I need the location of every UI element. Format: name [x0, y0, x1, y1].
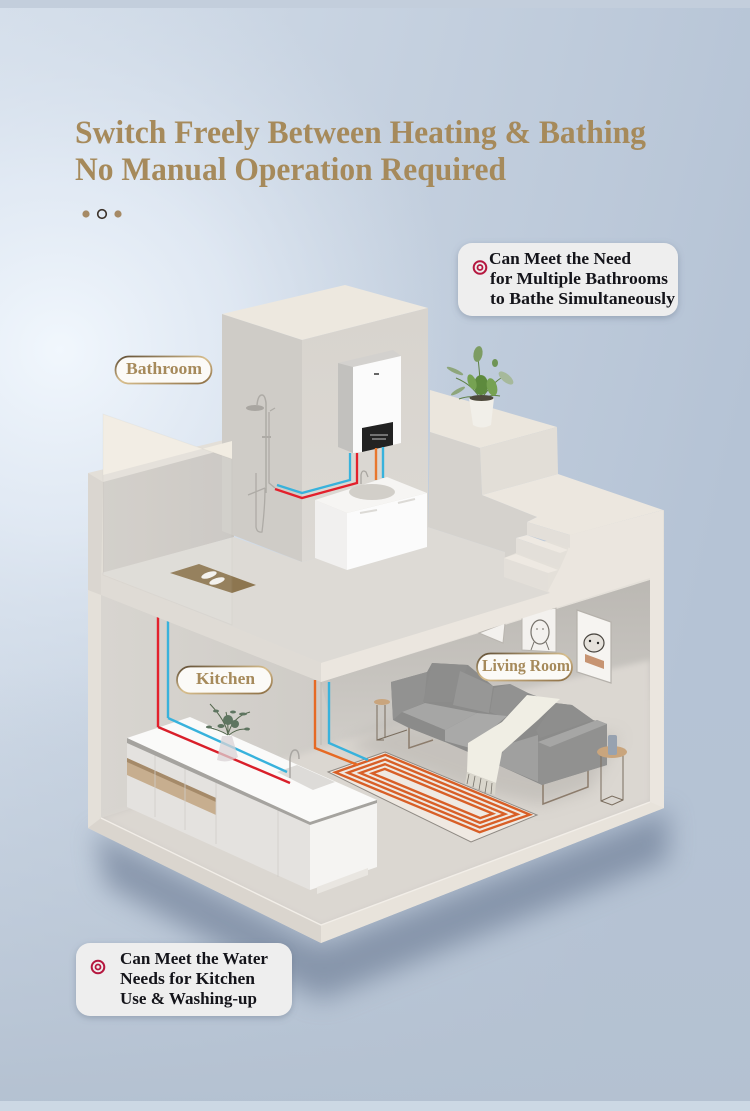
- label: Kitchen: Kitchen: [196, 669, 256, 688]
- pagination dots: [82, 210, 122, 218]
- kitchen pipes on counter top: [158, 718, 290, 783]
- heater outlet pipes: [376, 447, 383, 480]
- callout: multiple bathrooms: to Bathe Simultaneously: [490, 289, 676, 308]
- upper floor surface: [101, 527, 550, 663]
- hot and cold pipes to shower: [275, 453, 357, 498]
- kitchen sink and tap: [277, 750, 335, 790]
- callout: kitchen water: [76, 943, 292, 1016]
- basin cabinet: [315, 471, 427, 570]
- stairs: [504, 522, 570, 591]
- underfloor heating coil: [328, 752, 537, 842]
- label: Bathroom: [116, 356, 212, 384]
- side table right: [597, 735, 627, 805]
- label: Living Room: Living Room: [482, 656, 570, 675]
- side table left: [374, 699, 407, 740]
- water heater: [338, 350, 401, 453]
- callout: multiple bathrooms: Can Meet the Need: [489, 249, 631, 268]
- tall wall box: [222, 285, 428, 562]
- floor slab edge: [101, 510, 664, 808]
- title: No Manual Operation Required: [75, 152, 506, 188]
- lower level shell: [88, 473, 664, 943]
- label: Bathroom: Bathroom: [126, 359, 202, 378]
- bathroom side wall: [88, 438, 234, 595]
- back cushions: [423, 663, 593, 738]
- shower set: [246, 395, 275, 532]
- vase plant: [206, 704, 250, 761]
- lower level pipes: [158, 616, 368, 765]
- glass shower screen: [103, 414, 232, 625]
- seats: [402, 703, 538, 782]
- label: Kitchen: [177, 666, 272, 694]
- wall art: [479, 608, 611, 683]
- potted plant: [446, 345, 515, 428]
- callout: kitchen water: Can Meet the Water: [120, 949, 268, 968]
- sofa right arm: [538, 720, 607, 785]
- sofa legs: [409, 726, 588, 804]
- icon: target: [474, 261, 486, 274]
- title: Switch Freely Between Heating & Bathing: [75, 115, 646, 151]
- kitchen counter: [127, 717, 377, 894]
- icon: target: [92, 961, 104, 973]
- building shadow: [95, 810, 668, 1000]
- sofa left arm: [391, 672, 427, 720]
- callout: multiple bathrooms: [458, 243, 678, 316]
- control panel: [362, 422, 393, 452]
- bath mat and slippers: [170, 564, 256, 593]
- sofa silhouette: [391, 663, 607, 785]
- isometric house cutaway: [88, 285, 664, 943]
- callout: multiple bathrooms: for Multiple Bathrooms: [490, 269, 669, 288]
- blanket: [465, 695, 560, 795]
- label: Living Room: [477, 654, 572, 680]
- upper level step block: [428, 390, 663, 558]
- title: [75, 115, 646, 188]
- living room sofa: [391, 663, 607, 804]
- callout: kitchen water: Use & Washing-up: [120, 989, 257, 1008]
- callout: kitchen water: Needs for Kitchen: [120, 969, 255, 988]
